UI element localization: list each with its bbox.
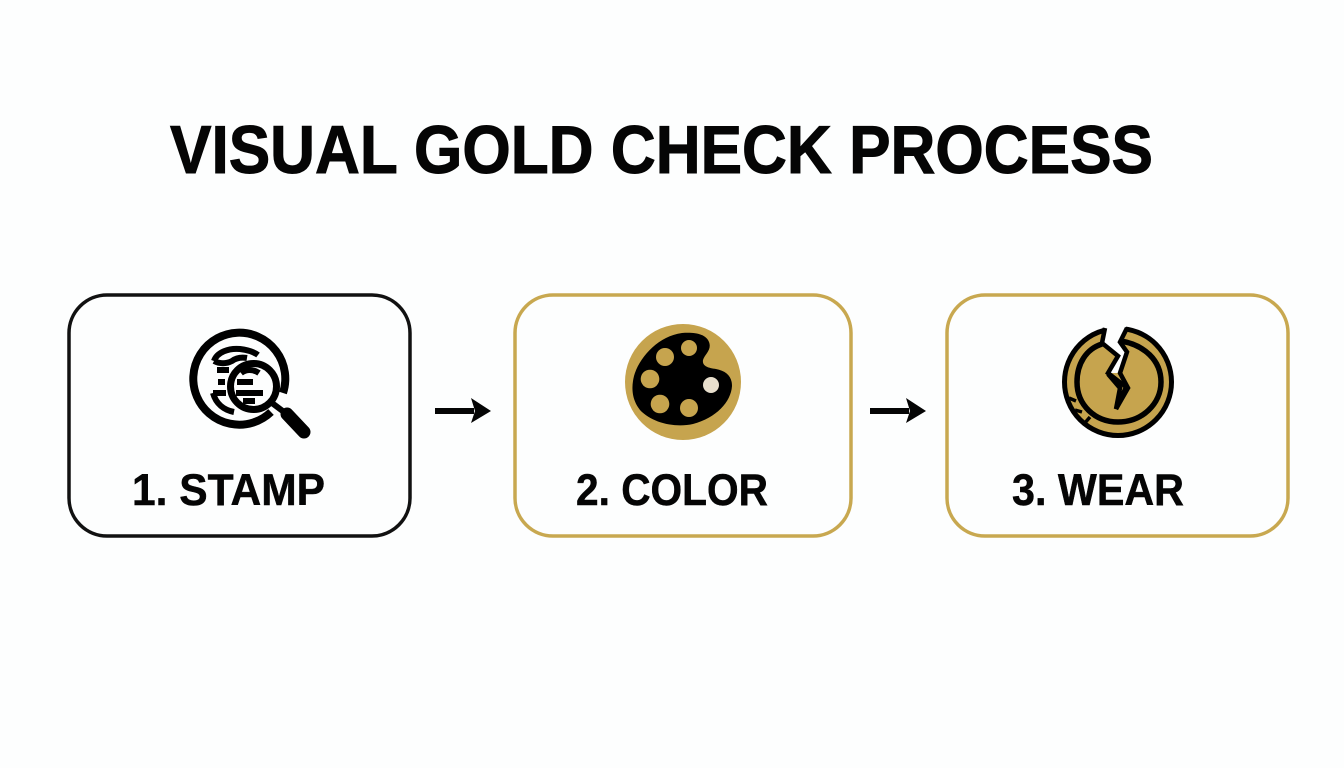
label: 3. WEAR: 3. WEAR	[1012, 466, 1184, 515]
title: VISUAL GOLD CHECK PROCESS	[170, 112, 1153, 188]
panel: wear	[947, 295, 1288, 536]
icon: magnifier over coin	[193, 333, 304, 432]
panel: stamp	[69, 295, 410, 536]
label: 2. COLOR: 2. COLOR	[576, 466, 768, 515]
arrow: stamp to color	[435, 398, 491, 423]
arrow: color to wear	[870, 398, 926, 423]
label: 1. STAMP: 1. STAMP	[132, 466, 325, 515]
icon: cracked gold coin	[1064, 324, 1172, 436]
panel: color	[515, 295, 851, 536]
icon: paint palette	[625, 324, 741, 440]
